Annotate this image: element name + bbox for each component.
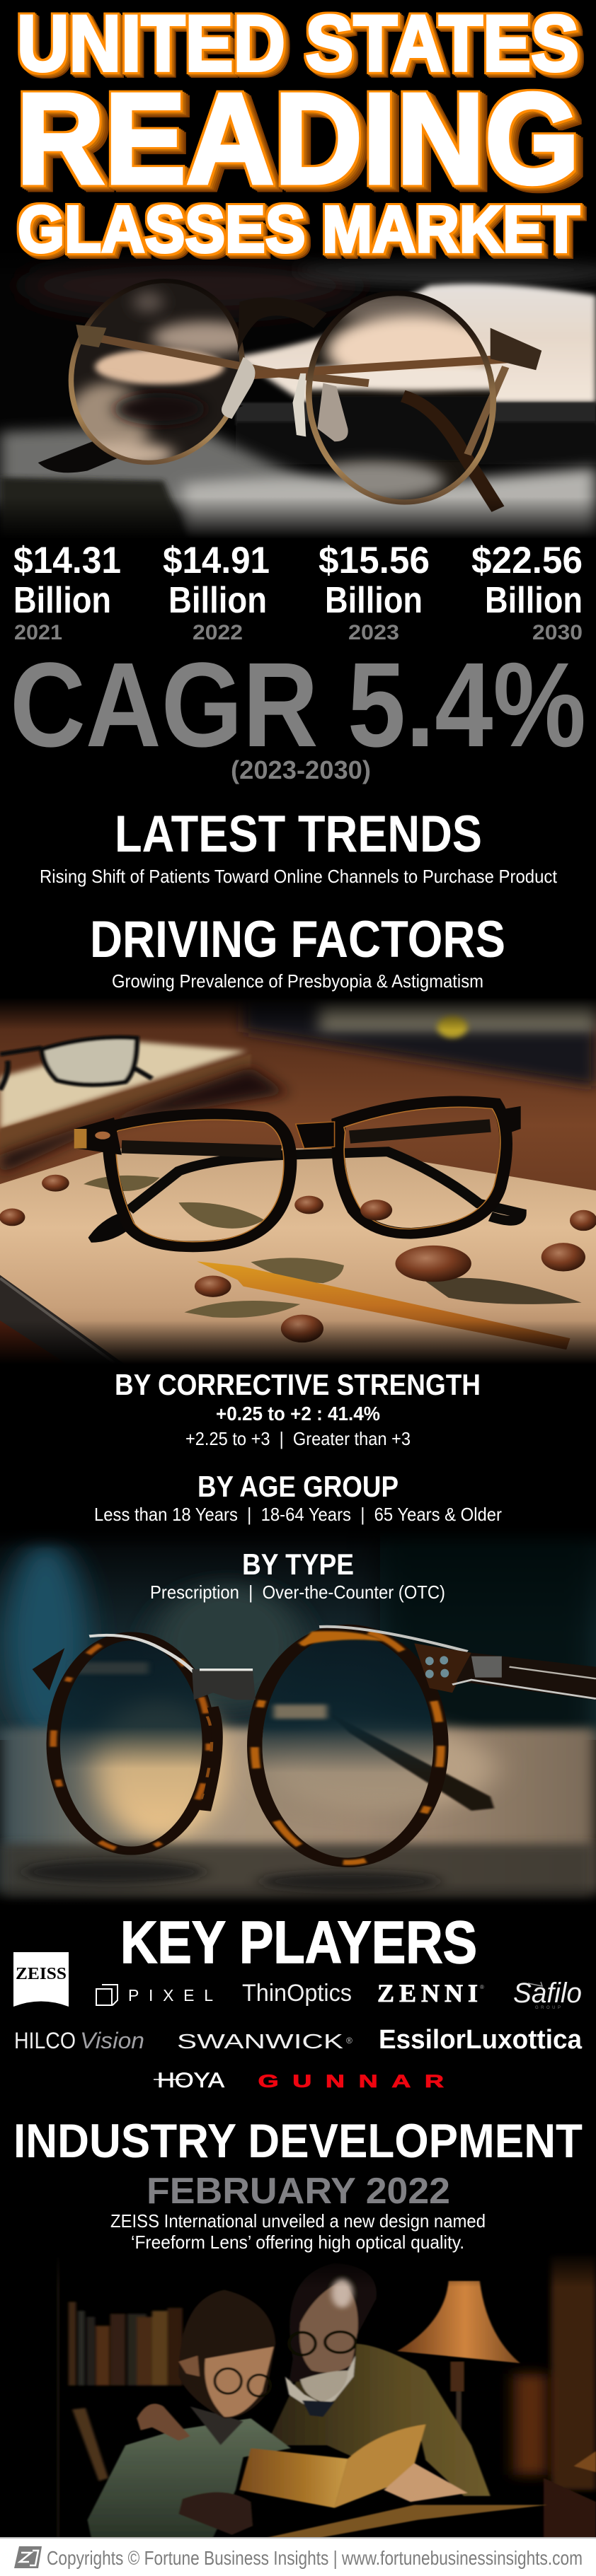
value 2023: $15.56 bbox=[319, 540, 430, 581]
heading: BY TYPE bbox=[242, 1548, 354, 1581]
heading: latest trends: LATEST TRENDS bbox=[115, 806, 482, 863]
value 2023: Billion bbox=[325, 580, 423, 621]
value 2021: $14.31 bbox=[13, 540, 121, 581]
left lens interior bbox=[74, 284, 239, 460]
development description: ZEISS International unveiled a new design named bbox=[110, 2210, 486, 2232]
pencil bbox=[197, 1261, 570, 1350]
value 2022: Billion bbox=[168, 580, 267, 621]
nuts bbox=[0, 1175, 596, 1342]
book bbox=[239, 2425, 547, 2538]
other categories: +2.25 to +3 | Greater than +3 bbox=[185, 1428, 411, 1449]
text: driving factors detail: Growing Prevalence of Presbyopia & Astigmatism bbox=[112, 970, 483, 992]
value 2022: 2022 bbox=[193, 621, 243, 644]
temple arm under lenses bbox=[130, 1151, 521, 1221]
man bbox=[266, 2263, 491, 2496]
lamp bbox=[397, 2281, 520, 2452]
main frame bbox=[108, 1101, 506, 1246]
heading: driving factors: DRIVING FACTORS bbox=[90, 911, 505, 968]
value 2022 bbox=[163, 540, 270, 644]
logo: Zeiss bbox=[13, 1952, 69, 2007]
logo: Safilo: Safilo bbox=[513, 1978, 582, 2009]
frame rims bbox=[53, 1629, 441, 1862]
development description: ‘Freeform Lens’ offering high optical quality. bbox=[131, 2232, 464, 2253]
bookshelf bbox=[57, 2257, 183, 2538]
logo: Hilco Vision: HILCO bbox=[14, 2028, 76, 2053]
logo: Swanwick bbox=[177, 2031, 353, 2053]
value 2030: Billion bbox=[485, 580, 583, 621]
footer logo bbox=[14, 2546, 42, 2568]
logo: Hilco Vision bbox=[14, 2028, 144, 2053]
title line: Reading: READING bbox=[16, 66, 580, 211]
logo: Zeiss: ZEISS bbox=[16, 1965, 67, 1983]
leaves bbox=[84, 1176, 582, 1318]
categories: Less than 18 Years | 18-64 Years | 65 Years & Older bbox=[94, 1504, 502, 1525]
wall and window bbox=[551, 2254, 596, 2490]
logo: EssilorLuxottica: EssilorLuxottica bbox=[379, 2025, 583, 2055]
photo: man and boy reading with lamp bbox=[0, 2239, 596, 2538]
right lens interior bbox=[311, 296, 490, 499]
segment: by type bbox=[150, 1548, 445, 1603]
value 2021: 2021 bbox=[14, 621, 62, 644]
logo: Zenni: ZENNI bbox=[377, 1979, 478, 2007]
logo: Swanwick: ® bbox=[346, 2036, 353, 2046]
title bbox=[16, 0, 580, 266]
photo: round metal glasses on a desk bbox=[0, 257, 596, 537]
development description bbox=[110, 2210, 486, 2253]
logo: Gunnar: GUNNAR bbox=[258, 2071, 444, 2091]
heading: key players: KEY PLAYERS bbox=[120, 1909, 477, 1975]
market size figures bbox=[13, 540, 583, 644]
photo: tortoise-shell glasses on table bbox=[0, 1514, 596, 1983]
segment: by age group bbox=[94, 1470, 502, 1525]
value 2030: $22.56 bbox=[471, 540, 583, 581]
value 2021 bbox=[13, 540, 121, 644]
leading share: +0.25 to +2 : 41.4% bbox=[216, 1403, 380, 1425]
footer bar bbox=[0, 2537, 596, 2576]
value 2030 bbox=[471, 540, 583, 644]
value 2021: Billion bbox=[13, 580, 111, 621]
boy bbox=[88, 2290, 291, 2538]
logo: Pixel bbox=[96, 1985, 213, 2005]
text: latest trends detail: Rising Shift of Patients Toward Online Channels to Purchase Product bbox=[40, 866, 558, 887]
logo: Swanwick: SWANWICK bbox=[177, 2031, 344, 2053]
heading: BY CORRECTIVE STRENGTH bbox=[115, 1368, 481, 1401]
logos: key players bbox=[13, 1952, 583, 2092]
logo: Hilco Vision: Vision bbox=[80, 2028, 144, 2053]
value 2023: 2023 bbox=[348, 621, 399, 644]
CAGR period: (2023-2030) bbox=[231, 755, 371, 784]
logo: Safilo: GROUP bbox=[535, 2006, 561, 2010]
value 2023 bbox=[319, 540, 430, 644]
logo: ThinOptics: ThinOptics bbox=[242, 1980, 352, 2007]
value 2022: $14.91 bbox=[163, 540, 270, 581]
development date: FEBRUARY 2022 bbox=[147, 2171, 450, 2212]
small background glasses bbox=[0, 1038, 152, 1090]
segment: by corrective strength bbox=[115, 1368, 481, 1449]
logo: Zenni: ® bbox=[480, 1984, 484, 1990]
logo: Hoya: HOYA bbox=[157, 2069, 224, 2092]
value 2030: 2030 bbox=[532, 621, 583, 644]
heading: BY AGE GROUP bbox=[197, 1470, 399, 1503]
photo: black frame glasses on paper with nuts and pencil bbox=[0, 976, 596, 1377]
logo: Pixel: PIXEL bbox=[128, 1986, 213, 2004]
categories: Prescription | Over-the-Counter (OTC) bbox=[150, 1582, 445, 1603]
